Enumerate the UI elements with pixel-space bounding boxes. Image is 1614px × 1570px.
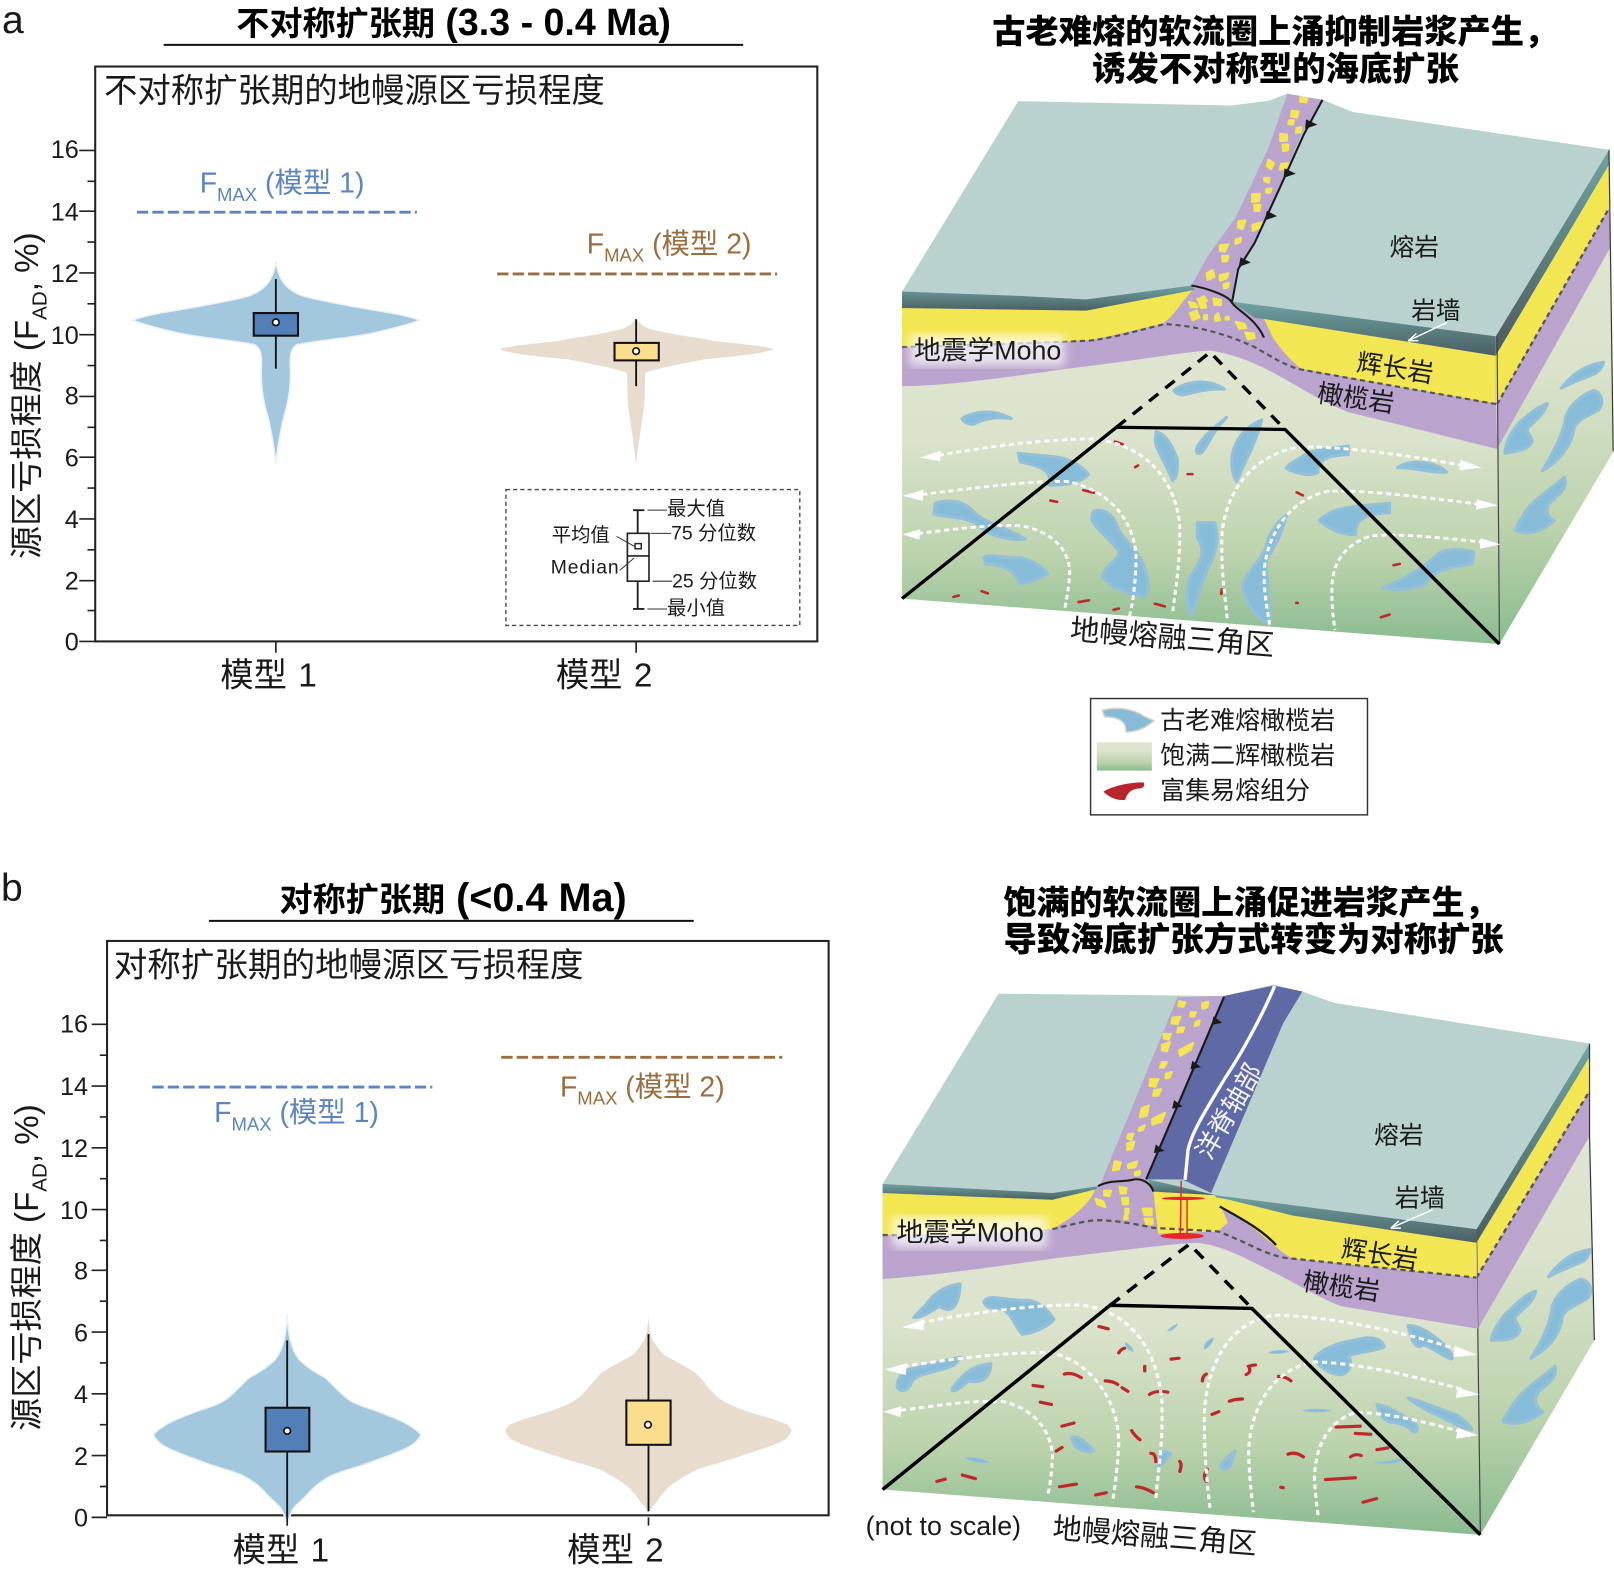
FMAX model 1 line and label b: F <box>214 1097 231 1129</box>
label: lava a: 熔岩 <box>1390 233 1439 261</box>
label: peridotite b: 橄榄岩 <box>1301 1267 1382 1307</box>
y axis a: 6 <box>65 444 79 472</box>
y axis a: 8 <box>65 383 79 411</box>
legend: rock types: 古老难熔橄榄岩 <box>1160 707 1335 735</box>
swatch: refractory peridotite <box>1102 708 1154 732</box>
y axis title b: , %) <box>9 1104 46 1163</box>
y axis b: 4 <box>74 1381 88 1409</box>
chart title b: 对称扩张期的地幔源区亏损程度 <box>114 946 583 984</box>
gabbro layer b <box>883 1188 1477 1278</box>
legend: box plot key: 最大值 <box>667 498 725 520</box>
y axis a: 0 <box>65 629 79 657</box>
right side face b <box>1477 1044 1594 1535</box>
label: mantle melting triangle b: 地幔熔融三角区 <box>1051 1512 1258 1561</box>
legend: box plot key <box>506 490 800 625</box>
y axis b: 10 <box>60 1197 88 1225</box>
lava top surface b <box>883 985 1590 1229</box>
legend: rock types: 饱满二辉橄榄岩 <box>1160 742 1335 770</box>
y axis a <box>51 136 95 657</box>
x axis labels b: 模型 2 <box>567 1533 664 1570</box>
x axis labels a: 模型 2 <box>556 658 652 695</box>
right side face <box>1496 150 1614 644</box>
FMAX model 2 line and label b <box>501 1057 782 1109</box>
FMAX model 1 line and label b <box>152 1087 432 1134</box>
legend: box plot key: 最小值 <box>667 598 725 620</box>
label: peridotite a: 橄榄岩 <box>1316 379 1396 418</box>
note: not to scale: (not to scale) <box>866 1511 1021 1541</box>
legend: box plot key: 75 分位数 <box>671 523 756 545</box>
gabbro layer <box>902 289 1496 403</box>
legend: rock types <box>1091 699 1367 815</box>
heading: right diagram a: 古老难熔的软流圈上涌抑制岩浆产生， <box>992 13 1557 51</box>
fault and spreading triangles <box>1191 100 1322 338</box>
refractory peridotite patches <box>934 382 1474 625</box>
refractory peridotite patches b <box>897 1284 1472 1469</box>
mantle front face b <box>883 1236 1480 1535</box>
y axis title a: AD <box>28 291 51 320</box>
x axis labels b <box>233 1515 664 1570</box>
chart: violin plot b <box>9 941 829 1570</box>
FMAX model 1 line and label: MAX <box>217 184 257 205</box>
legend: box plot key: 平均值 <box>552 525 610 547</box>
FMAX model 2 line and label: F <box>587 228 604 260</box>
magma lenses and feeders <box>1161 1181 1205 1239</box>
heading: asymmetric spreading period: 不对称扩张期 (3.3 - 0.4 Ma) <box>236 1 671 43</box>
FMAX model 2 line and label: (模型 2) <box>644 228 751 260</box>
label: mantle melting triangle a: 地幔熔融三角区 <box>1069 613 1275 662</box>
FMAX model 1 line and label b: MAX <box>231 1113 272 1134</box>
diagram: block model b <box>883 985 1594 1535</box>
mantle flow arrows b <box>883 1305 1479 1517</box>
chart: violin plot a <box>9 67 817 695</box>
melting triangle b <box>883 1244 1480 1535</box>
y axis title b: AD <box>28 1163 51 1192</box>
heading: right diagram a: 诱发不对称型的海底扩张 <box>1092 51 1460 88</box>
label: gabbro a: 辉长岩 <box>1355 348 1435 389</box>
y axis b: 0 <box>74 1505 88 1533</box>
white glow behind Moho label b <box>892 1217 1047 1248</box>
y axis b <box>60 1011 107 1533</box>
y axis a: 16 <box>51 136 79 164</box>
violin: model 2 asymmetric <box>499 316 774 463</box>
y axis title a: , %) <box>9 232 46 291</box>
y axis b: 8 <box>74 1258 88 1286</box>
peridotite layer <box>902 284 1497 449</box>
fault line with triangles b <box>1098 997 1276 1245</box>
FMAX model 1 line and label: (模型 1) <box>257 168 364 200</box>
FMAX model 1 line and label <box>137 168 417 212</box>
violin: model 1 symmetric <box>153 1314 421 1528</box>
ridge axis strips <box>1096 986 1302 1224</box>
peridotite layer b <box>883 1179 1478 1329</box>
diagram: block model a <box>902 94 1614 644</box>
y axis a: 4 <box>65 506 79 534</box>
label: seismic Moho a: 地震学Moho <box>914 335 1061 365</box>
FMAX model 2 line and label b: (模型 2) <box>617 1071 725 1103</box>
lava top surface <box>902 94 1609 336</box>
sheeted dikes layer <box>902 285 1496 356</box>
violin: model 2 symmetric <box>505 1317 792 1513</box>
FMAX model 2 line and label: MAX <box>604 245 644 266</box>
arrow: dike wall b <box>1391 1210 1433 1228</box>
sheeted dikes layer b <box>883 1179 1477 1243</box>
panel label b: b <box>1 867 23 910</box>
x axis labels b: 模型 1 <box>233 1533 329 1570</box>
label: dike wall a: 岩墙 <box>1411 297 1461 325</box>
y axis title a: 源区亏损程度 (F <box>9 320 46 559</box>
y axis a: 10 <box>51 322 79 350</box>
mantle flow arrows <box>903 439 1500 630</box>
y axis b: 6 <box>74 1319 88 1347</box>
FMAX model 2 line and label b: MAX <box>577 1088 617 1109</box>
label: seismic Moho b: 地震学Moho <box>897 1218 1044 1248</box>
FMAX model 1 line and label b: (模型 1) <box>272 1097 379 1129</box>
y axis b: 2 <box>74 1443 88 1471</box>
swatch: enriched components <box>1103 782 1144 800</box>
label: dike wall b: 岩墙 <box>1395 1185 1445 1213</box>
arrow: dike wall a <box>1408 322 1447 341</box>
violin: model 1 asymmetric <box>133 261 420 463</box>
y axis a: 12 <box>51 260 79 288</box>
y axis title b: 源区亏损程度 (F <box>9 1192 46 1431</box>
FMAX model 1 line and label: F <box>200 168 217 200</box>
heading: right diagram b <box>1004 884 1504 959</box>
y axis a: 2 <box>65 567 79 595</box>
legend: box plot key: Median <box>551 556 619 578</box>
legend: rock types: 富集易熔组分 <box>1160 777 1310 805</box>
heading: right diagram b: 导致海底扩张方式转变为对称扩张 <box>1004 921 1504 959</box>
melting triangle <box>902 352 1499 644</box>
chart title a: 不对称扩张期的地幔源区亏损程度 <box>104 73 605 110</box>
heading: right diagram a <box>992 13 1557 88</box>
y axis b: 16 <box>60 1011 88 1039</box>
rift strip with melt pockets <box>1189 94 1322 339</box>
x axis labels a <box>220 641 652 695</box>
label: ridge axis: 洋脊轴部 <box>1190 1058 1268 1164</box>
heading: symmetric spreading period: 对称扩张期 (<0.4 Ma) <box>279 876 627 920</box>
fertile melt flecks b <box>937 1327 1388 1502</box>
label: gabbro b: 辉长岩 <box>1339 1234 1420 1275</box>
FMAX model 2 line and label b: F <box>560 1071 577 1103</box>
y axis b: 12 <box>60 1135 88 1163</box>
y axis b: 14 <box>60 1073 88 1101</box>
heading: right diagram b: 饱满的软流圈上涌促进岩浆产生， <box>1004 884 1497 921</box>
swatch: fertile lherzolite <box>1097 742 1152 771</box>
panel label a: a <box>2 0 24 42</box>
fertile melt flecks <box>954 442 1400 617</box>
y axis a: 14 <box>51 198 79 226</box>
mantle front face <box>902 347 1499 644</box>
white glow behind Moho label a <box>910 335 1064 366</box>
label: lava b: 熔岩 <box>1374 1122 1424 1150</box>
FMAX model 2 line and label <box>497 228 777 274</box>
x axis labels a: 模型 1 <box>220 658 317 695</box>
legend: box plot key: 25 分位数 <box>672 570 757 592</box>
